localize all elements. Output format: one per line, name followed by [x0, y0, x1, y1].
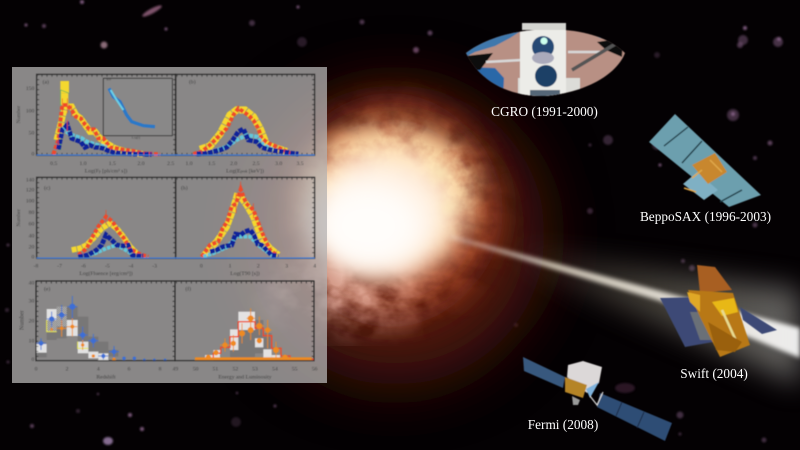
chart: row 1 a and b: Number: [16, 106, 22, 123]
panel: histogram figure: [12, 67, 327, 383]
chart: row 2 c and h: 1: [229, 263, 232, 269]
chart frames: [36, 281, 314, 361]
chart: row 3 e and f: 50: [193, 367, 199, 373]
chart ticks: [36, 281, 314, 361]
yellow peach clouds: [310, 128, 474, 252]
chart a yellow: [60, 81, 69, 105]
chart ticks: [37, 177, 315, 258]
chart b red: [193, 108, 292, 154]
chart: row 1 a and b: Log(Epeak [keV]): [226, 167, 264, 174]
chart: row 2 c and h: -3: [152, 263, 157, 269]
chart frames: [37, 177, 315, 258]
chart: row 2 c and h: 0: [200, 263, 203, 269]
baselines: [37, 153, 315, 156]
chart: row 3 e and f: 51: [213, 367, 218, 373]
chart: row 1 a and b: 3.0: [275, 161, 282, 167]
chart f boxes: [195, 312, 280, 361]
Swift right solar panel: [740, 307, 777, 334]
chart a series: [53, 105, 160, 154]
chart: row 2 c and h: -5: [105, 263, 110, 269]
axis labels: (e): [44, 286, 50, 293]
chart b yellow: [200, 110, 287, 152]
Fermi gold module: [565, 377, 587, 398]
chart: row 1 a and b: Log(Fp [ph/cm² s]): [85, 167, 127, 174]
chart: row 3 e and f: 53: [252, 367, 258, 373]
chart: row 1 a and b: 100: [26, 108, 35, 114]
chart: row 1 a and b: 3.5: [296, 161, 304, 167]
chart: row 3 e and f: 2: [66, 367, 69, 373]
satellite: BeppoSAX: [649, 114, 761, 207]
satellite: Swift: [660, 265, 777, 357]
chart frames: [37, 74, 315, 155]
chart: row 2 c and h: Log(Fluence [erg/cm²]): [79, 270, 133, 277]
chart c red: [78, 217, 148, 257]
chart: row 3 e and f: Redshift: [96, 373, 116, 380]
axis labels: (a): [43, 78, 49, 85]
chart b navy: [197, 129, 298, 154]
chart: row 3 e and f: 54: [272, 367, 278, 373]
CGRO top module: [522, 23, 566, 30]
panel background: [12, 67, 327, 383]
Swift left solar panel: [660, 297, 713, 347]
bright core: [319, 154, 451, 270]
inset: [103, 78, 172, 139]
BeppoSAX solar panels: [649, 114, 761, 207]
chart: row 1 a and b: 2.0: [230, 161, 237, 167]
label: BeppoSAX: BeppoSAX (1996-2003): [640, 209, 771, 224]
chart: row 2 c and h: 120: [26, 188, 35, 194]
inset: Log(t): [132, 135, 140, 139]
chart e orange crosses: [50, 325, 116, 361]
outer red glow: [245, 85, 545, 385]
Fermi right solar panel: [597, 393, 672, 441]
CGRO earth ellipse: [466, 29, 626, 97]
chart: row 1 a and b: 1.0: [185, 161, 193, 167]
satellite: Fermi: [523, 357, 672, 441]
chart c navy: [78, 235, 143, 257]
chart: row 2 c and h: 140: [26, 178, 35, 184]
chart: row 2 c and h: -8: [34, 263, 39, 269]
chart: row 2 c and h: Log(T90 [s]): [230, 270, 260, 277]
chart: row 1 a and b: 2.0: [137, 161, 145, 167]
baselines: [37, 256, 315, 259]
charts: [16, 74, 318, 380]
jet glow: [510, 250, 800, 385]
chart: row 3 e and f: (f): [185, 286, 191, 293]
chart: row 1 a and b: 1.0: [79, 161, 87, 167]
jet core: [450, 235, 800, 358]
chart: row 1 a and b: 1.5: [109, 161, 116, 167]
chart h red: [202, 189, 277, 257]
chart: row 1 a and b: 0: [32, 152, 35, 158]
chart: row 1 a and b: 2.5: [252, 161, 260, 167]
chart: row 3 e and f: 0: [32, 357, 35, 363]
chart e boxes: [37, 307, 272, 361]
chart: row 1 a and b: 1.5: [208, 161, 215, 167]
chart f red step: [195, 322, 314, 359]
chart: row 2 c and h: [16, 177, 316, 277]
dark orange shell: [290, 105, 490, 315]
hot spots: [433, 165, 456, 214]
inset: 300: [106, 78, 111, 82]
axis labels: (c): [44, 184, 50, 191]
label: Swift: Swift (2004): [680, 366, 748, 381]
Swift top panel: [697, 265, 732, 293]
chart: row 3 e and f: 49: [173, 367, 178, 373]
chart: row 1 a and b: (b): [189, 78, 196, 85]
chart: row 3 e and f: 0: [35, 367, 38, 373]
label: CGRO: CGRO (1991-2000): [491, 104, 598, 119]
chart h yellow: [203, 197, 278, 256]
chart f orange crosses: [195, 315, 312, 360]
Fermi left solar panel: [523, 357, 565, 388]
explosion: [245, 85, 545, 385]
chart: row 3 e and f: 10: [29, 339, 35, 345]
chart: row 1 a and b: 50: [29, 131, 35, 137]
chart: row 2 c and h: -6: [81, 263, 86, 269]
chart: row 2 c and h: 2: [257, 263, 260, 269]
chart: row 3 e and f: 56: [312, 367, 318, 373]
chart: row 3 e and f: Number: [19, 310, 25, 330]
chart: row 3 e and f: 8: [159, 367, 162, 373]
chart h cyan: [203, 237, 273, 257]
chart: row 2 c and h: 20: [29, 245, 35, 251]
chart: row 2 c and h: 0: [32, 255, 35, 261]
chart: row 3 e and f: 20: [29, 319, 35, 325]
label: Fermi: Fermi (2008): [528, 417, 598, 432]
chart: row 3 e and f: 4: [97, 367, 100, 373]
chart: row 3 e and f: [19, 280, 318, 380]
peach smooth layer: [303, 133, 467, 277]
white core: [310, 180, 426, 272]
chart: row 3 e and f: 52: [233, 367, 238, 373]
chart b cyan: [213, 135, 273, 152]
chart ticks: [37, 74, 315, 155]
jet: [450, 235, 800, 385]
chart: row 1 a and b: 150: [26, 86, 35, 92]
satellite: CGRO: [460, 23, 630, 100]
mottled orange streaks: [300, 110, 490, 310]
chart e blue crosses: [37, 296, 119, 359]
chart: row 1 a and b: [16, 74, 315, 174]
chart: row 2 c and h: 80: [29, 210, 35, 216]
chart: row 2 c and h: 3: [285, 263, 288, 269]
chart: row 2 c and h: 100: [26, 198, 35, 204]
chart: row 3 e and f: 30: [29, 298, 35, 304]
Swift body: [688, 290, 750, 357]
chart: row 2 c and h: Number: [16, 209, 22, 227]
chart: row 2 c and h: 40: [29, 233, 35, 239]
chart: row 3 e and f: Energy and Luminosity: [218, 374, 272, 380]
lower pink lobe: [270, 262, 420, 322]
chart: row 2 c and h: 60: [29, 222, 35, 228]
chart: row 2 c and h: 4: [313, 263, 316, 269]
chart: row 3 e and f: 40: [29, 280, 35, 286]
Fermi white cube: [567, 361, 602, 393]
BeppoSAX body: [683, 172, 718, 200]
chart: row 2 c and h: -4: [129, 263, 134, 269]
chart: row 3 e and f: 55: [292, 367, 298, 373]
chart: row 1 a and b: 0.5: [50, 161, 57, 167]
chart h navy: [210, 230, 278, 256]
chart: row 2 c and h: -7: [57, 263, 62, 269]
chart c cyan: [85, 245, 133, 256]
chart: row 1 a and b: 2.5: [167, 161, 174, 167]
chart: row 3 e and f: 6: [128, 367, 131, 373]
chart c yellow: [72, 223, 137, 253]
chart: row 2 c and h: (h): [181, 184, 188, 191]
